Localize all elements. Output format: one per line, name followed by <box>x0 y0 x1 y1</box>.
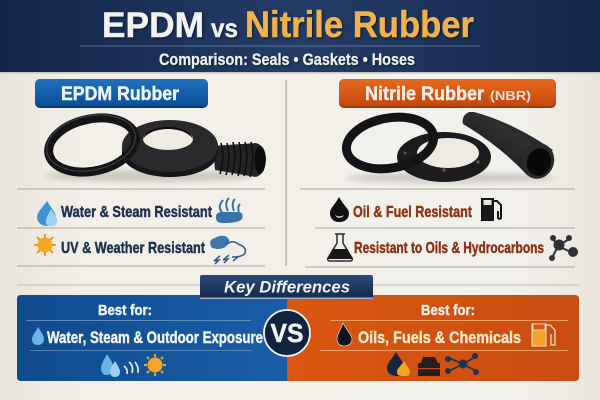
product photo: NBR ring, gasket and tube <box>342 111 559 183</box>
divider <box>17 266 265 267</box>
heading: EPDM Rubber <box>35 79 208 108</box>
divider <box>305 266 575 268</box>
header band <box>0 0 600 74</box>
heading: Nitrile Rubber (NBR): (NBR) <box>490 88 531 103</box>
divider <box>300 188 575 190</box>
icons: oil and fuel drops, toolbox, molecule <box>387 352 479 376</box>
heading: Key Differences: Key Differences <box>224 278 350 296</box>
divider <box>17 228 265 229</box>
title <box>102 4 474 45</box>
VS badge: VS <box>270 318 304 348</box>
feature: UV and weather <box>34 234 245 264</box>
VS badge <box>264 310 310 356</box>
feature: oil and fuel <box>330 197 501 222</box>
flat washer <box>122 120 218 177</box>
right comparison block: Nitrile best for <box>287 295 579 381</box>
icon: fuel pump <box>532 324 555 346</box>
icon: steam cloud <box>216 198 242 223</box>
icon: molecule <box>549 235 578 261</box>
panel: key differences <box>17 275 579 381</box>
O-ring <box>342 111 438 175</box>
icon: fuel pump <box>482 198 501 220</box>
icon: water drops <box>37 201 57 226</box>
left comparison block: EPDM best for <box>17 295 287 381</box>
feature: UV and weather: UV & Weather Resistant <box>61 240 206 257</box>
divider <box>315 228 575 229</box>
product photo: EPDM ring, washer and corrugated hose <box>41 107 266 182</box>
title: EPDM <box>102 6 204 45</box>
right comparison block: Nitrile best for: Best for: <box>421 302 475 319</box>
corrugated hose <box>213 142 266 177</box>
heading: EPDM Rubber: EPDM Rubber <box>61 84 180 105</box>
icon: sun <box>34 234 56 256</box>
icon: storm cloud <box>210 236 245 264</box>
panel: EPDM rubber <box>17 79 266 266</box>
flanged gasket <box>397 132 491 182</box>
icon: flask <box>328 234 352 261</box>
icon: oil drop <box>330 197 349 222</box>
left comparison block: EPDM best for: Best for: <box>98 302 152 319</box>
left comparison block: EPDM best for: Water, Steam & Outdoor Exposure <box>47 329 263 347</box>
subtitle: Comparison: Seals • Gaskets • Hoses <box>159 50 415 69</box>
feature: water and steam: Water & Steam Resistant <box>61 204 213 221</box>
center divider <box>286 80 287 266</box>
divider <box>17 188 265 190</box>
heading: Key Differences <box>200 275 373 299</box>
rubber tube <box>463 112 559 183</box>
title: vs <box>211 13 238 43</box>
feature: water and steam <box>37 198 242 226</box>
feature: oils and hydrocarbons <box>328 234 578 261</box>
icons: drops, steam, sun <box>101 354 166 377</box>
heading: Nitrile Rubber (NBR): Nitrile Rubber <box>365 84 485 105</box>
O-ring <box>41 107 141 180</box>
icon: drop <box>32 327 44 345</box>
feature: oil and fuel: Oil & Fuel Resistant <box>353 204 473 221</box>
heading: Nitrile Rubber (NBR) <box>339 79 556 108</box>
icon: oil drop <box>337 323 352 346</box>
title: Nitrile Rubber <box>245 4 474 45</box>
decorative rules beside heading <box>17 284 200 286</box>
right comparison block: Nitrile best for: Oils, Fuels & Chemicals <box>358 329 521 347</box>
panel: Nitrile rubber <box>300 79 578 268</box>
